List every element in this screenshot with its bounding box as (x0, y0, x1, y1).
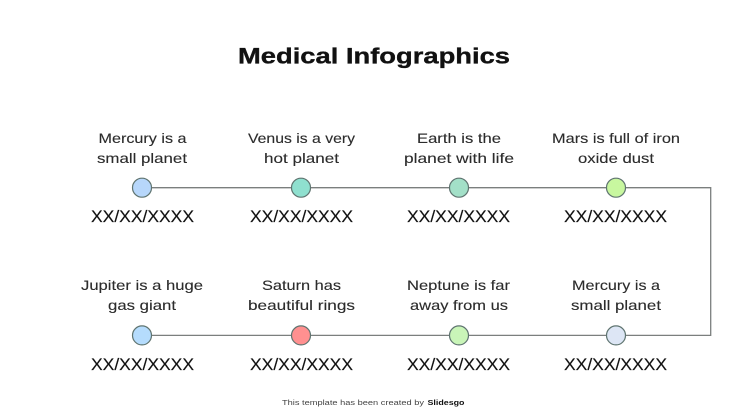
milestone 5: gas giant (108, 297, 176, 313)
footer credit (282, 400, 464, 407)
milestone 3 (404, 130, 514, 226)
milestone 6: XX/XX/XXXX (250, 356, 353, 374)
milestone 7: away from us (410, 297, 508, 313)
milestone 8: XX/XX/XXXX (564, 356, 667, 374)
timeline connector line (142, 188, 711, 335)
milestone 8 (564, 277, 667, 374)
milestone 3: XX/XX/XXXX (407, 208, 510, 226)
milestone 3: Earth is the (417, 130, 501, 146)
milestone 1 (91, 130, 194, 226)
milestone 5: XX/XX/XXXX (91, 356, 194, 374)
milestone 7: Neptune is far (407, 277, 510, 293)
milestone 4: XX/XX/XXXX (564, 208, 667, 226)
milestone 2: hot planet (264, 150, 339, 166)
milestone 2 (248, 130, 355, 226)
footer credit: This template has been created by (282, 400, 425, 407)
milestone 8: Mercury is a (572, 277, 660, 293)
milestone 5 (81, 277, 203, 374)
milestone 6: beautiful rings (248, 297, 355, 313)
footer credit: Slidesgo (428, 400, 464, 407)
milestone 7: XX/XX/XXXX (407, 356, 510, 374)
milestone 3: planet with life (404, 150, 514, 166)
milestone 1: XX/XX/XXXX (91, 208, 194, 226)
milestone 2: XX/XX/XXXX (250, 208, 353, 226)
milestone 5: Jupiter is a huge (81, 277, 203, 293)
milestone 4 (552, 130, 680, 226)
milestone 7 (407, 277, 510, 374)
milestone 8: small planet (571, 297, 661, 313)
milestone 6 (248, 277, 355, 374)
milestone 1: Mercury is a (98, 130, 187, 146)
title: Medical Infographics (238, 44, 510, 68)
milestone 2: Venus is a very (248, 130, 355, 146)
milestone 4: Mars is full of iron (552, 130, 680, 146)
milestone 6: Saturn has (262, 277, 341, 293)
milestone 1: small planet (97, 150, 187, 166)
milestone 4: oxide dust (578, 150, 654, 166)
